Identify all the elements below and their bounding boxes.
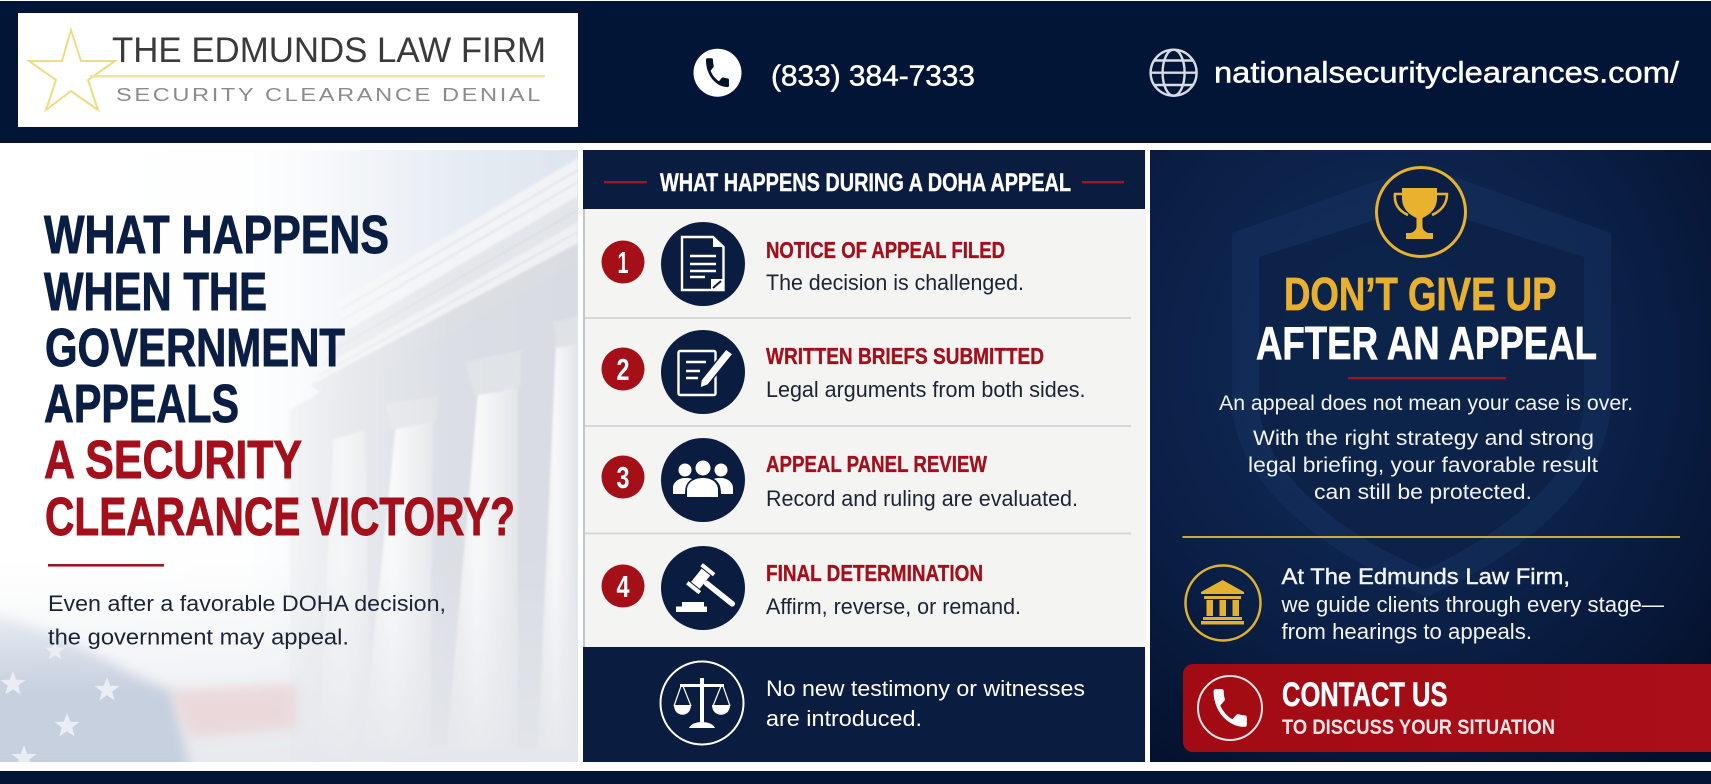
panel: don't give up bbox=[1150, 150, 1711, 762]
heading rule bbox=[1348, 377, 1506, 379]
panel: left headline bbox=[0, 150, 578, 784]
footer note text: are introduced. bbox=[766, 706, 922, 731]
website: nationalsecurityclearances.com/ bbox=[1214, 56, 1680, 90]
icon: trophy bbox=[1376, 168, 1466, 256]
contact call to action bbox=[1183, 664, 1711, 752]
steps footer note bbox=[583, 647, 1145, 762]
logo bbox=[18, 13, 578, 127]
reassurance text: can still be protected. bbox=[1314, 480, 1532, 504]
heading: DON’T GIVE UP bbox=[1284, 268, 1556, 320]
step 4 title: FINAL DETERMINATION bbox=[766, 560, 983, 586]
step 4 bbox=[602, 546, 1021, 630]
phone number: (833) 384-7333 bbox=[771, 60, 975, 92]
step 1 bbox=[602, 222, 1024, 306]
courthouse background bbox=[0, 150, 578, 784]
footer note text: No new testimony or witnesses bbox=[766, 676, 1085, 701]
reassurance text: legal briefing, your favorable result bbox=[1248, 453, 1598, 477]
headline: A SECURITY bbox=[44, 430, 302, 490]
firm text: we guide clients through every stage— bbox=[1280, 592, 1664, 617]
number 4 bbox=[602, 564, 644, 608]
icon: globe bbox=[1151, 50, 1197, 96]
heading bbox=[1256, 268, 1597, 369]
reassurance text: An appeal does not mean your case is over. bbox=[1219, 391, 1633, 415]
number 2: 2 bbox=[616, 352, 630, 387]
icon: written brief bbox=[661, 330, 745, 414]
logo name: THE EDMUNDS LAW FIRM bbox=[112, 31, 546, 70]
flag background bbox=[0, 616, 298, 762]
number 3 bbox=[602, 456, 644, 498]
contact title: CONTACT US bbox=[1282, 676, 1448, 714]
footer note text bbox=[766, 676, 1085, 731]
step 1 title: NOTICE OF APPEAL FILED bbox=[766, 237, 1005, 263]
icon: logo star bbox=[29, 30, 115, 110]
icon: scales of justice bbox=[660, 662, 744, 744]
headline: WHAT HAPPENS bbox=[44, 205, 389, 265]
firm text: At The Edmunds Law Firm, bbox=[1282, 564, 1570, 589]
firm text: from hearings to appeals. bbox=[1282, 619, 1532, 644]
headline: GOVERNMENT bbox=[45, 318, 345, 378]
icon: gavel bbox=[661, 546, 745, 630]
step 2 text: Legal arguments from both sides. bbox=[766, 377, 1086, 402]
logo tagline: SECURITY CLEARANCE DENIAL bbox=[116, 85, 543, 105]
number 4: 4 bbox=[616, 569, 630, 604]
step 3 text: Record and ruling are evaluated. bbox=[766, 486, 1078, 511]
firm statement bbox=[1186, 564, 1664, 644]
headline: APPEALS bbox=[44, 374, 239, 434]
footer bar bbox=[0, 771, 1711, 784]
reassurance text: With the right strategy and strong bbox=[1253, 426, 1594, 450]
number 1: 1 bbox=[618, 245, 628, 280]
headline: CLEARANCE VICTORY? bbox=[45, 487, 515, 547]
headline: WHEN THE bbox=[44, 262, 267, 322]
icon: phone bbox=[694, 49, 742, 97]
number 2 bbox=[602, 348, 644, 390]
step 2 bbox=[602, 330, 1086, 414]
intro text bbox=[48, 591, 446, 650]
shield background bbox=[1232, 165, 1611, 597]
firm text bbox=[1280, 564, 1664, 644]
headline rule bbox=[48, 564, 164, 567]
icon: courthouse bbox=[1186, 566, 1260, 640]
icon: phone bbox=[1198, 676, 1262, 740]
icon: document bbox=[661, 222, 745, 306]
intro text: Even after a favorable DOHA decision, bbox=[48, 591, 446, 616]
step 3 bbox=[602, 438, 1078, 522]
steps heading: WHAT HAPPENS DURING A DOHA APPEAL bbox=[660, 169, 1071, 197]
steps heading bbox=[583, 150, 1145, 209]
header bar bbox=[0, 1, 1711, 143]
heading: AFTER AN APPEAL bbox=[1256, 317, 1597, 369]
reassurance text bbox=[1219, 391, 1633, 504]
number 1 bbox=[602, 240, 644, 284]
contact subtitle: TO DISCUSS YOUR SITUATION bbox=[1282, 716, 1555, 739]
headline bbox=[44, 205, 515, 547]
step 2 title: WRITTEN BRIEFS SUBMITTED bbox=[766, 343, 1044, 369]
icon: appeal panel bbox=[661, 438, 745, 522]
step 4 text: Affirm, reverse, or remand. bbox=[766, 594, 1021, 619]
panel: DOHA appeal steps bbox=[583, 150, 1146, 762]
step 3 title: APPEAL PANEL REVIEW bbox=[766, 451, 987, 477]
logo rule bbox=[90, 75, 545, 78]
step 1 text: The decision is challenged. bbox=[766, 270, 1024, 295]
number 3: 3 bbox=[616, 460, 630, 495]
intro text: the government may appeal. bbox=[48, 624, 349, 650]
